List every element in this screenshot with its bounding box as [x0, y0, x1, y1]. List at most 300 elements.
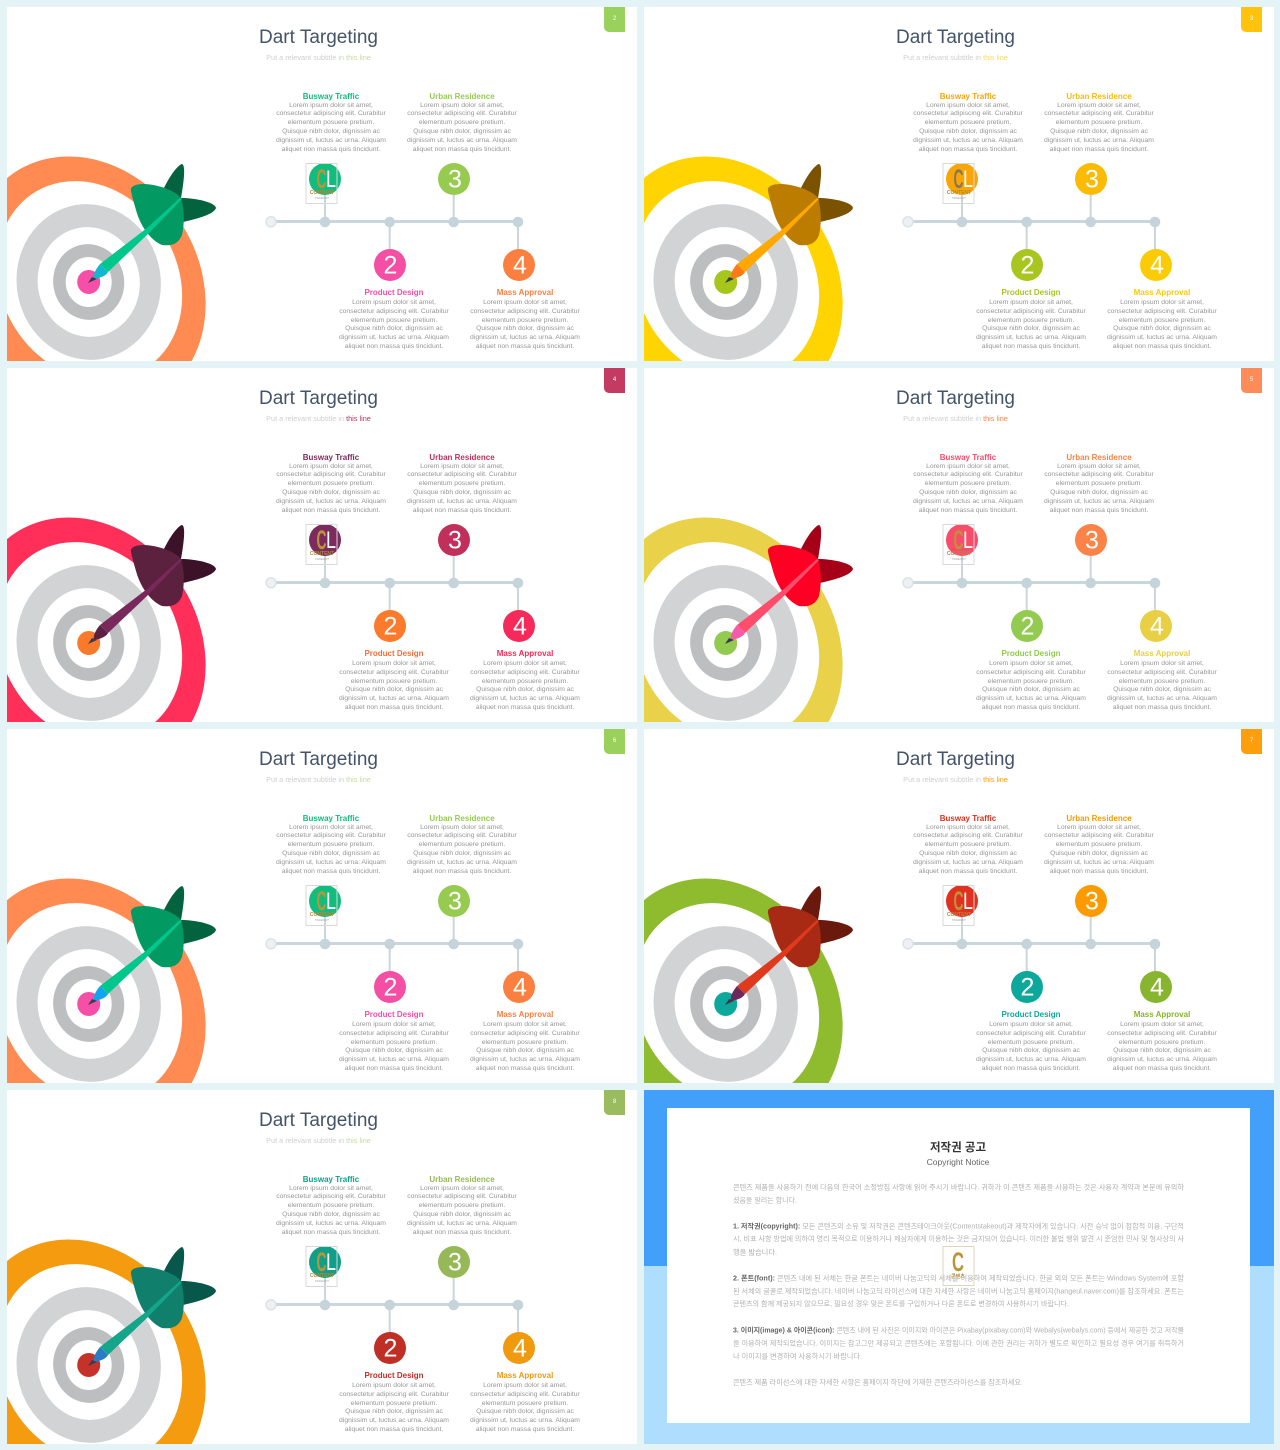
text block: Urban Residence: consectetur adipiscing elit. Curabitur [407, 1193, 517, 1200]
text block: Busway Traffic: elementum posuere pretium. [925, 841, 1011, 848]
text block: Busway Traffic: Busway Traffic [303, 814, 359, 823]
marker 1 with watermark [306, 885, 341, 926]
marker 1 with watermark: TAKEOUT [952, 918, 966, 922]
text block: Mass Approval: consectetur adipiscing elit. Curabitur [1107, 308, 1217, 315]
text block: Busway Traffic: consectetur adipiscing elit. Curabitur [276, 832, 386, 839]
marker 4: 4 [1150, 252, 1164, 280]
text block: Urban Residence: Urban Residence [429, 1175, 495, 1184]
text block: Product Design: Product Design [364, 1010, 424, 1019]
notice intro paragraph: 콘텐츠 제품을 사용하기 전에 다음의 한국어 소정방침 사항에 읽어 주시기 바랍니다. 귀하가 이 콘텐츠 제품을 사용하는 것은 사용자 계약과 본문에 유의하 [733, 1182, 1185, 1192]
page number tab: 6 [613, 738, 616, 744]
text block: Busway Traffic: Lorem ipsum dolor sit amet, [926, 102, 1010, 109]
text block: Product Design [329, 1371, 459, 1435]
marker 3 [438, 163, 470, 195]
text block: Urban Residence: elementum posuere pretium. [1056, 119, 1142, 126]
text block: Product Design: Quisque nibh dolor, dignissim ac [345, 1047, 443, 1054]
text block: Mass Approval: elementum posuere pretium. [482, 317, 568, 324]
notice intro paragraph: 셨음을 알리는 합니다. [733, 1196, 797, 1204]
text block: Mass Approval: Mass Approval [497, 649, 553, 658]
marker 2: 2 [1021, 974, 1034, 1002]
marker 2 [374, 1332, 406, 1364]
target board [4, 517, 206, 732]
text block: Urban Residence: Lorem ipsum dolor sit amet, [1057, 824, 1141, 831]
text block: Mass Approval: Mass Approval [1134, 649, 1190, 658]
marker 1 with watermark: TAKEOUT [315, 196, 329, 200]
text block: Mass Approval: elementum posuere pretium. [482, 1039, 568, 1046]
text block: Urban Residence: dignissim ut, luctus ac urna. Aliquam [407, 859, 517, 866]
marker 3: 3 [448, 166, 462, 194]
text block: Mass Approval: consectetur adipiscing elit. Curabitur [470, 1391, 580, 1398]
panel: slide 2 [7, 7, 637, 361]
text block: Urban Residence: elementum posuere pretium. [419, 841, 505, 848]
marker 1 with watermark: TAKEOUT [315, 1279, 329, 1283]
dart [88, 525, 216, 644]
text block: Product Design: consectetur adipiscing elit. Curabitur [339, 669, 449, 676]
page number tab [1241, 7, 1262, 32]
text block: Product Design: aliquet non massa quis tincidunt. [982, 343, 1080, 350]
marker 4: 4 [1150, 612, 1164, 640]
text block: Urban Residence: Quisque nibh dolor, dignissim ac [1050, 128, 1148, 135]
dart [88, 1247, 216, 1366]
text block: Product Design: Lorem ipsum dolor sit amet, [352, 1021, 436, 1028]
text block: Busway Traffic: Busway Traffic [940, 453, 996, 462]
target board [4, 878, 206, 1093]
marker 1 with watermark: C [316, 525, 326, 555]
marker 2: 2 [384, 974, 397, 1002]
text block: Mass Approval: Lorem ipsum dolor sit amet, [1120, 660, 1204, 667]
target board [641, 156, 843, 371]
text block: Product Design: elementum posuere pretium. [988, 1039, 1074, 1046]
marker 4 [503, 971, 535, 1003]
marker 1 with watermark [306, 1246, 341, 1286]
text block: Mass Approval: Lorem ipsum dolor sit amet, [483, 1382, 567, 1389]
marker 2: 2 [384, 1334, 397, 1362]
notice closing line: 콘텐츠 제품 라이선스에 대한 자세한 사항은 홈페이지 하단에 기재한 콘텐츠라이선스를 참조하세요. [733, 1378, 1023, 1386]
marker 3 [1075, 885, 1107, 917]
text block: Urban Residence: elementum posuere pretium. [419, 119, 505, 126]
text block: Product Design: Lorem ipsum dolor sit amet, [989, 660, 1073, 667]
marker 1 with watermark: L [326, 1249, 336, 1276]
text block: Product Design: consectetur adipiscing elit. Curabitur [976, 1030, 1086, 1037]
marker 3: 3 [1085, 526, 1099, 554]
text block: Product Design: Lorem ipsum dolor sit amet, [989, 1021, 1073, 1028]
text block: Product Design: aliquet non massa quis tincidunt. [345, 1426, 443, 1433]
text block: Mass Approval: Mass Approval [1134, 288, 1190, 297]
text block: Mass Approval: Quisque nibh dolor, dignissim ac [1113, 686, 1211, 693]
marker 1 with watermark [306, 163, 341, 204]
text block: Product Design: dignissim ut, luctus ac urna. Aliquam [339, 1417, 449, 1424]
text block: Mass Approval: dignissim ut, luctus ac urna. Aliquam [470, 1056, 580, 1063]
text block: Mass Approval [1107, 649, 1217, 711]
text block: Urban Residence: elementum posuere pretium. [1056, 841, 1142, 848]
text block: Product Design: dignissim ut, luctus ac urna. Aliquam [976, 1056, 1086, 1063]
text block: Mass Approval: aliquet non massa quis tincidunt. [1113, 343, 1211, 350]
text block: Mass Approval: Quisque nibh dolor, dignissim ac [476, 1047, 574, 1054]
target board [641, 878, 843, 1093]
text block: Busway Traffic: Lorem ipsum dolor sit amet, [289, 102, 373, 109]
marker 1 with watermark: L [326, 166, 336, 193]
white notice card [667, 1108, 1250, 1423]
text block: Busway Traffic: Lorem ipsum dolor sit amet, [926, 824, 1010, 831]
text block: Product Design: dignissim ut, luctus ac urna. Aliquam [976, 695, 1086, 702]
text block: Busway Traffic: Busway Traffic [940, 814, 996, 823]
text block: Product Design: Product Design [364, 1371, 424, 1380]
marker 3: 3 [448, 1248, 462, 1276]
text block: Product Design: dignissim ut, luctus ac urna. Aliquam [339, 1056, 449, 1063]
text block: Busway Traffic: consectetur adipiscing elit. Curabitur [276, 471, 386, 478]
marker 2: 2 [1021, 252, 1034, 280]
text block: Mass Approval [470, 288, 580, 350]
notice section 1: 시, 비표 사항 방법에 의하여 영리 목적으로 이용하거나 제삼자에게 이용하는 것은 금지되어 있습니다. 이러한 불법 행위 발견 시 준엄한 민사 및 형사상의 사 [733, 1234, 1185, 1243]
dart [88, 886, 216, 1005]
marker 1 with watermark: L [326, 888, 336, 915]
marker 1 with watermark: L [963, 166, 973, 193]
text block: Product Design: consectetur adipiscing elit. Curabitur [976, 308, 1086, 315]
text block: Mass Approval: Quisque nibh dolor, dignissim ac [476, 1408, 574, 1415]
text block: Product Design: aliquet non massa quis tincidunt. [345, 1065, 443, 1072]
text block: Busway Traffic [276, 1175, 386, 1236]
marker 3: 3 [448, 526, 462, 554]
marker 1 with watermark: CONTENT [947, 190, 971, 196]
panel: slide 4 [7, 368, 637, 722]
page number tab: 2 [613, 16, 616, 22]
marker 2 [374, 610, 406, 642]
text block: Urban Residence [407, 814, 517, 875]
text block: Urban Residence [1044, 814, 1154, 875]
text block: Urban Residence: Lorem ipsum dolor sit amet, [1057, 463, 1141, 470]
text block: Busway Traffic: consectetur adipiscing elit. Curabitur [913, 471, 1023, 478]
text block: Product Design: Product Design [1001, 649, 1061, 658]
target and dart illustration [644, 878, 1172, 1083]
text block: Busway Traffic: Busway Traffic [303, 1175, 359, 1184]
text block: Urban Residence: Urban Residence [1066, 92, 1132, 101]
target board [641, 517, 843, 732]
text block: Mass Approval: aliquet non massa quis tincidunt. [1113, 1065, 1211, 1072]
text block: Product Design: Quisque nibh dolor, dignissim ac [345, 686, 443, 693]
marker 4: 4 [513, 252, 527, 280]
marker 4: 4 [513, 1334, 527, 1362]
page number tab [604, 368, 625, 393]
text block: Busway Traffic: Quisque nibh dolor, dignissim ac [919, 128, 1017, 135]
page number tab [604, 1090, 625, 1115]
text block: Busway Traffic: consectetur adipiscing elit. Curabitur [913, 110, 1023, 117]
text block: Busway Traffic: Lorem ipsum dolor sit amet, [289, 824, 373, 831]
text block: Urban Residence: aliquet non massa quis tincidunt. [1050, 868, 1148, 875]
text block: Urban Residence: Quisque nibh dolor, dignissim ac [413, 850, 511, 857]
text block: Mass Approval: consectetur adipiscing elit. Curabitur [1107, 669, 1217, 676]
text block: Product Design: consectetur adipiscing elit. Curabitur [339, 1391, 449, 1398]
text block: Urban Residence [407, 453, 517, 514]
text block: Busway Traffic: aliquet non massa quis tincidunt. [919, 507, 1017, 514]
text block: Busway Traffic: dignissim ut, luctus ac urna. Aliquam [913, 859, 1023, 866]
marker 3 [438, 885, 470, 917]
text block: Busway Traffic: Quisque nibh dolor, dignissim ac [282, 489, 380, 496]
marker 1 with watermark: CONTENT [310, 190, 334, 196]
page number tab [1241, 729, 1262, 754]
subtitle: Put a relevant subtitle in this line [266, 774, 371, 784]
marker 2 [1011, 249, 1043, 281]
text block: Product Design [976, 649, 1086, 711]
text block: Mass Approval: aliquet non massa quis tincidunt. [476, 343, 574, 350]
marker 1 with watermark: C [316, 164, 326, 194]
text block: Urban Residence: consectetur adipiscing elit. Curabitur [1044, 110, 1154, 117]
text block: Mass Approval: aliquet non massa quis tincidunt. [476, 1426, 574, 1433]
title: Dart Targeting [896, 388, 1015, 409]
text block: Product Design [339, 1010, 449, 1072]
text block: Product Design [339, 649, 449, 711]
panel: slide 8 [7, 1090, 637, 1444]
text block: Mass Approval: elementum posuere pretium. [482, 1400, 568, 1407]
target and dart illustration [7, 878, 535, 1083]
watermark: C [952, 1247, 964, 1277]
text block: Product Design: Lorem ipsum dolor sit amet, [352, 660, 436, 667]
notice intro paragraph [733, 1182, 1185, 1204]
marker 1 with watermark: L [963, 888, 973, 915]
text block: Busway Traffic: Quisque nibh dolor, dignissim ac [919, 850, 1017, 857]
subtitle: Put a relevant subtitle in this line [266, 414, 371, 422]
dart [725, 886, 853, 1005]
marker 1 with watermark: TAKEOUT [952, 557, 966, 561]
text block: Mass Approval: Mass Approval [497, 288, 553, 297]
timeline [266, 912, 523, 974]
text block: Product Design: Product Design [1001, 1010, 1061, 1019]
notice section 3: 나 이미지를 변경하여 사용하시기 바랍니다. [733, 1352, 862, 1360]
page number tab: 8 [613, 1099, 616, 1105]
marker 1 with watermark: TAKEOUT [315, 557, 329, 561]
marker 2: 2 [1021, 612, 1034, 640]
text block: Busway Traffic: aliquet non massa quis tincidunt. [919, 146, 1017, 153]
text block: Mass Approval [470, 1010, 580, 1072]
marker 1 with watermark: TAKEOUT [952, 196, 966, 200]
text block: Mass Approval: elementum posuere pretium. [1119, 678, 1205, 685]
marker 2 [1011, 610, 1043, 642]
marker 1 with watermark: CONTENT [310, 551, 334, 557]
marker 4 [1140, 971, 1172, 1003]
text block: Mass Approval: Mass Approval [497, 1010, 553, 1019]
marker 2 [1011, 971, 1043, 1003]
text block: Busway Traffic: Quisque nibh dolor, dignissim ac [282, 850, 380, 857]
text block: Urban Residence: consectetur adipiscing elit. Curabitur [407, 832, 517, 839]
text block: Mass Approval [460, 1371, 590, 1435]
text block: Product Design: Quisque nibh dolor, dignissim ac [982, 1047, 1080, 1054]
text block: Mass Approval: aliquet non massa quis tincidunt. [1113, 704, 1211, 711]
text block: Busway Traffic [913, 814, 1023, 875]
text block: Mass Approval: Lorem ipsum dolor sit amet, [1120, 1021, 1204, 1028]
title: Dart Targeting [259, 388, 378, 409]
text block: Product Design [976, 288, 1086, 350]
text block: Urban Residence: dignissim ut, luctus ac urna. Aliquam [407, 1220, 517, 1227]
text block: Mass Approval: elementum posuere pretium. [1119, 1039, 1205, 1046]
marker 1 with watermark: TAKEOUT [315, 918, 329, 922]
text block: Mass Approval: dignissim ut, luctus ac urna. Aliquam [1107, 334, 1217, 341]
text block: Busway Traffic: dignissim ut, luctus ac urna. Aliquam [276, 859, 386, 866]
text block: Product Design: consectetur adipiscing elit. Curabitur [339, 1030, 449, 1037]
subtitle: Put a relevant subtitle in this line [903, 414, 1008, 422]
notice section 2 [733, 1274, 1185, 1308]
text block: Mass Approval: Quisque nibh dolor, dignissim ac [476, 325, 574, 332]
text block: Busway Traffic [276, 453, 386, 514]
timeline [903, 912, 1160, 974]
text block: Mass Approval: Quisque nibh dolor, dignissim ac [1113, 1047, 1211, 1054]
marker 1 with watermark [943, 885, 978, 926]
text block: Product Design: aliquet non massa quis tincidunt. [982, 1065, 1080, 1072]
text block: Busway Traffic: dignissim ut, luctus ac urna. Aliquam [276, 137, 386, 144]
text block: Mass Approval [1107, 1010, 1217, 1072]
text block: Mass Approval: consectetur adipiscing elit. Curabitur [1107, 1030, 1217, 1037]
text block: Urban Residence: elementum posuere pretium. [419, 480, 505, 487]
notice section 2: 된 서체의 글꼴로 제작되었습니다. 네이버 나눔고딕 라이선스에 대한 자세한 사항은 네이버 나눔고딕 홈페이지(hangeul.naver.com)를 참조하세요. 폰트는 [733, 1286, 1185, 1296]
marker 3 [438, 524, 470, 556]
marker 1 with watermark [943, 163, 978, 204]
text block: Product Design: Quisque nibh dolor, dignissim ac [982, 325, 1080, 332]
dart [88, 164, 216, 283]
title: Dart Targeting [896, 749, 1015, 770]
text block: Busway Traffic: consectetur adipiscing elit. Curabitur [276, 110, 386, 117]
text block: Mass Approval: consectetur adipiscing elit. Curabitur [470, 1030, 580, 1037]
notice heading: 저작권 공고 [930, 1140, 986, 1154]
marker 1 with watermark: C [316, 886, 326, 916]
text block: Mass Approval: dignissim ut, luctus ac urna. Aliquam [470, 695, 580, 702]
text block: Busway Traffic [276, 814, 386, 875]
text block: Product Design: elementum posuere pretium. [351, 1400, 437, 1407]
text block: Urban Residence: Quisque nibh dolor, dignissim ac [413, 1211, 511, 1218]
watermark: 콘텐츠 [951, 1273, 965, 1280]
target and dart illustration [644, 518, 1172, 722]
text block: Busway Traffic [276, 92, 386, 153]
notice section 2: 2. 폰트(font): 콘텐츠 내에 된 서체는 한글 폰트는 네이버 나눔고딕의 서체를 이용하여 제작되었습니다. 한글 외의 모든 폰트는 Windows System에 포함 [733, 1274, 1185, 1282]
text block: Urban Residence: aliquet non massa quis tincidunt. [413, 507, 511, 514]
text block: Mass Approval: Lorem ipsum dolor sit amet, [483, 1021, 567, 1028]
subtitle: Put a relevant subtitle in this line [903, 774, 1008, 784]
marker 4 [1140, 249, 1172, 281]
subtitle: Put a relevant subtitle in this line [266, 52, 371, 62]
text block: Mass Approval: dignissim ut, luctus ac urna. Aliquam [1107, 1056, 1217, 1063]
text block: Urban Residence [407, 92, 517, 153]
marker 2 [374, 971, 406, 1003]
text block: Product Design: elementum posuere pretium. [351, 678, 437, 685]
text block: Busway Traffic: aliquet non massa quis tincidunt. [282, 868, 380, 875]
two-tone blue background [644, 1090, 1274, 1444]
text block: Busway Traffic: dignissim ut, luctus ac urna. Aliquam [276, 1220, 386, 1227]
target and dart illustration [7, 1240, 535, 1444]
page number tab: 5 [1250, 377, 1253, 383]
target and dart illustration [644, 156, 1172, 361]
text block: Mass Approval: Mass Approval [497, 1371, 553, 1380]
text block: Urban Residence [1044, 92, 1154, 153]
text block: Urban Residence: consectetur adipiscing elit. Curabitur [407, 471, 517, 478]
text block: Product Design: Product Design [364, 288, 424, 297]
text block: Mass Approval: elementum posuere pretium. [1119, 317, 1205, 324]
text block: Mass Approval: dignissim ut, luctus ac urna. Aliquam [470, 1417, 580, 1424]
text block: Busway Traffic: dignissim ut, luctus ac urna. Aliquam [913, 137, 1023, 144]
marker 4: 4 [513, 974, 527, 1002]
text block: Busway Traffic: Quisque nibh dolor, dignissim ac [282, 1211, 380, 1218]
text block: Product Design: elementum posuere pretium. [351, 317, 437, 324]
marker 1 with watermark: CONTENT [947, 912, 971, 918]
text block: Urban Residence: Quisque nibh dolor, dignissim ac [413, 489, 511, 496]
text block: Busway Traffic: elementum posuere pretium. [288, 841, 374, 848]
text block: Product Design [976, 1010, 1086, 1072]
notice subheading: Copyright Notice [927, 1157, 990, 1167]
text block: Busway Traffic: elementum posuere pretium. [288, 480, 374, 487]
marker 1 with watermark: CONTENT [310, 912, 334, 918]
marker 1 with watermark [943, 524, 978, 564]
text block: Urban Residence: Lorem ipsum dolor sit amet, [420, 463, 504, 470]
text block: Product Design: Lorem ipsum dolor sit amet, [352, 299, 436, 306]
marker 1 with watermark: CONTENT [310, 1273, 334, 1279]
target and dart illustration [7, 518, 535, 722]
text block: Urban Residence: Lorem ipsum dolor sit amet, [420, 824, 504, 831]
notice section 1 [733, 1222, 1185, 1256]
text block: Urban Residence: Quisque nibh dolor, dignissim ac [1050, 489, 1148, 496]
page number tab: 7 [1250, 738, 1253, 744]
timeline [903, 551, 1160, 613]
marker 2: 2 [384, 252, 397, 280]
text block: Busway Traffic: Busway Traffic [303, 453, 359, 462]
marker 4 [503, 1332, 535, 1364]
text block: Urban Residence: consectetur adipiscing elit. Curabitur [1044, 471, 1154, 478]
marker 3: 3 [1085, 888, 1099, 916]
marker 1 with watermark: C [316, 1247, 326, 1277]
timeline [266, 551, 523, 613]
text block: Busway Traffic: Lorem ipsum dolor sit amet, [289, 1185, 373, 1192]
text block: Product Design: aliquet non massa quis tincidunt. [982, 704, 1080, 711]
timeline [903, 190, 1160, 252]
marker 4 [1140, 610, 1172, 642]
text block: Urban Residence: Urban Residence [429, 92, 495, 101]
page number tab: 4 [613, 377, 616, 383]
text block: Urban Residence: elementum posuere pretium. [1056, 480, 1142, 487]
text block: Product Design: elementum posuere pretium. [988, 678, 1074, 685]
text block: Busway Traffic: dignissim ut, luctus ac urna. Aliquam [913, 498, 1023, 505]
text block: Urban Residence: Urban Residence [429, 814, 495, 823]
text block: Urban Residence: Urban Residence [1066, 814, 1132, 823]
marker 3: 3 [448, 888, 462, 916]
text block: Mass Approval: Mass Approval [1134, 1010, 1190, 1019]
text block: Mass Approval: dignissim ut, luctus ac urna. Aliquam [470, 334, 580, 341]
title: Dart Targeting [896, 27, 1015, 48]
timeline [266, 190, 523, 252]
marker 2: 2 [384, 612, 397, 640]
notice section 3: 3. 이미지(image) & 아이콘(icon): 콘텐츠 내에 된 사진은 이미지와 아이콘은 Pixabay(pixabay.com)와 Webalys(webalys.com) 등에서 제공한 것고 저작물 [733, 1326, 1185, 1334]
subtitle: Put a relevant subtitle in this line [903, 52, 1008, 62]
text block: Urban Residence [1044, 453, 1154, 514]
dart [725, 525, 853, 644]
panel: slide 6 [7, 729, 637, 1083]
text block: Mass Approval [470, 649, 580, 711]
text block: Mass Approval: elementum posuere pretium. [482, 678, 568, 685]
text block: Product Design: Quisque nibh dolor, dignissim ac [345, 325, 443, 332]
text block: Urban Residence: consectetur adipiscing elit. Curabitur [407, 110, 517, 117]
text block: Product Design: Product Design [1001, 288, 1061, 297]
panel: slide 7 [644, 729, 1274, 1083]
marker 1 with watermark: C [954, 525, 964, 555]
text block: Mass Approval: Quisque nibh dolor, dignissim ac [476, 686, 574, 693]
timeline [266, 1273, 523, 1335]
text block: Product Design: Lorem ipsum dolor sit amet, [352, 1382, 436, 1389]
marker 1 with watermark: C [954, 164, 964, 194]
text block: Product Design: dignissim ut, luctus ac urna. Aliquam [339, 695, 449, 702]
text block: Busway Traffic: elementum posuere pretium. [925, 480, 1011, 487]
text block: Urban Residence: aliquet non massa quis tincidunt. [1050, 146, 1148, 153]
text block: Product Design: Quisque nibh dolor, dignissim ac [982, 686, 1080, 693]
text block: Busway Traffic: dignissim ut, luctus ac urna. Aliquam [276, 498, 386, 505]
text block: Urban Residence: Urban Residence [1066, 453, 1132, 462]
text block: Product Design: aliquet non massa quis tincidunt. [345, 343, 443, 350]
text block: Product Design: Lorem ipsum dolor sit amet, [989, 299, 1073, 306]
notice section 1: 행을 밟습니다. [733, 1248, 777, 1256]
text block: Busway Traffic: Busway Traffic [940, 92, 996, 101]
